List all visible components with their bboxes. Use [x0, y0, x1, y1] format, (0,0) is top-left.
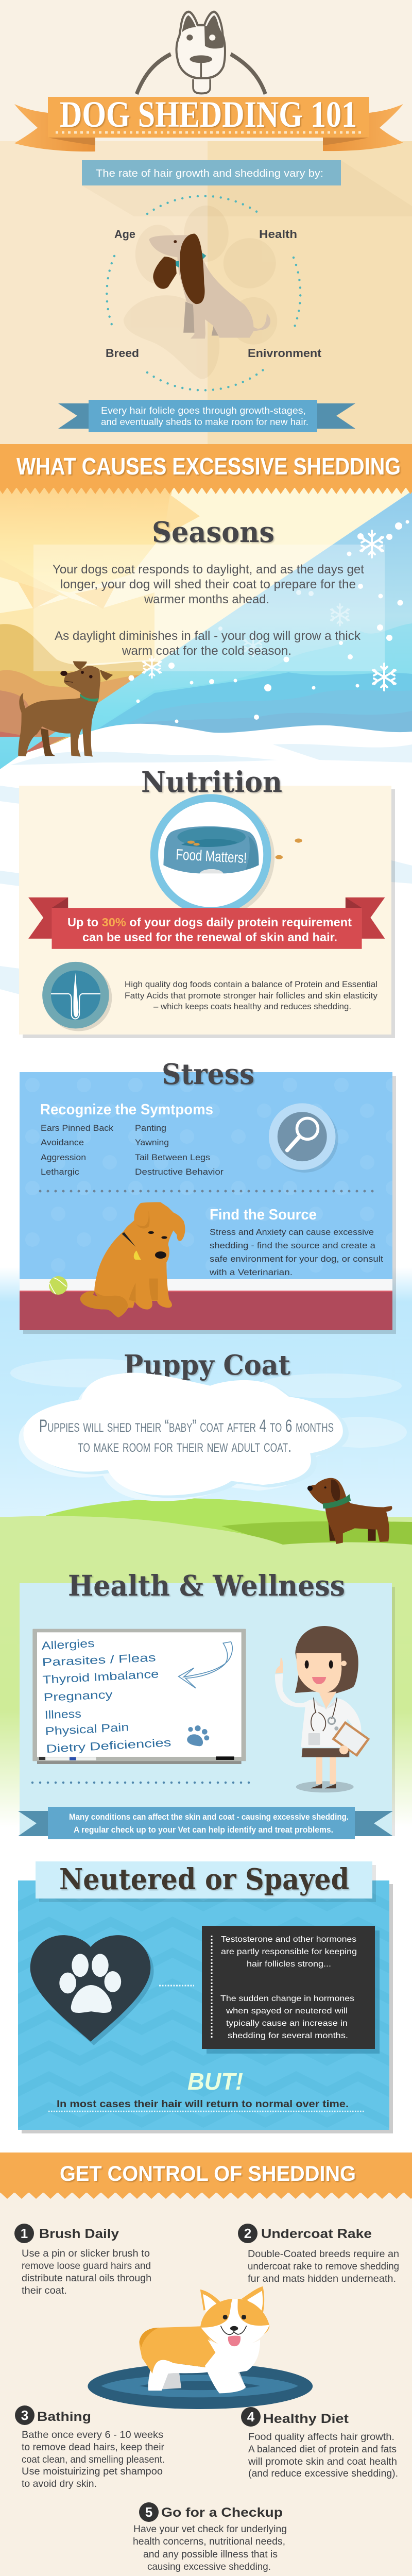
- heading: health and wellness: Health & Wellness: [68, 1569, 345, 1602]
- symptoms list: Lethargic: [41, 1167, 80, 1177]
- tip 5: go for a checkup: health concerns, nutritional needs,: [133, 2536, 285, 2547]
- tip 4: healthy diet: (and reduce excessive shedding).: [248, 2468, 398, 2479]
- but callout: [57, 2068, 349, 2110]
- heading: what causes excessive shedding: [0, 444, 412, 495]
- board list: Physical Pain: [45, 1720, 129, 1738]
- text box: hormones: The sudden change in hormones: [220, 1994, 354, 2003]
- faint paw behind dog: [124, 206, 277, 379]
- tip 2: undercoat rake: undercoat rake to remove shedding: [248, 2261, 399, 2272]
- panel: nutrition: [19, 786, 395, 1038]
- header background: [0, 0, 412, 450]
- snowflakes and snow dots: [129, 520, 409, 723]
- tip 1: brush daily: their coat.: [22, 2285, 67, 2296]
- subtitle box: The rate of hair growth and shedding vary by:: [96, 168, 323, 179]
- find the source text: Stress and Anxiety can cause excessive: [210, 1227, 374, 1237]
- board list: [41, 1637, 171, 1755]
- tip 5: go for a checkup: [133, 2502, 287, 2572]
- tip 2: undercoat rake: 2: [244, 2226, 251, 2241]
- get control background: [0, 2192, 412, 2576]
- symptoms list: Tail Between Legs: [135, 1153, 210, 1162]
- board list: Illness: [44, 1707, 81, 1721]
- heading: get control of shedding: [0, 2153, 412, 2199]
- tip 2: undercoat rake: Double-Coated breeds require an: [248, 2249, 399, 2260]
- tip 4: healthy diet: will promote skin and coat health: [248, 2456, 397, 2467]
- symptoms list: Destructive Behavior: [135, 1167, 224, 1177]
- heading: stress: Stress: [162, 1057, 254, 1091]
- tip 3: bathing: coat clean, and smelling pleasent.: [22, 2454, 165, 2465]
- panel: neutered or spayed: [18, 1880, 393, 2133]
- tip 1: brush daily: Brush Daily: [39, 2227, 119, 2241]
- tip 3: bathing: to avoid dry skin.: [22, 2479, 97, 2489]
- seasons text panel: [33, 545, 385, 671]
- tip 3: bathing: Bathing: [37, 2410, 91, 2424]
- tip 4: healthy diet: Food quality affects hair growth.: [248, 2432, 394, 2443]
- icon: hair follicle: [42, 962, 112, 1031]
- text box: hormones: when spayed or neutered will: [226, 2007, 348, 2015]
- seasons text: longer, your dog will shed their coat to prepare for the: [60, 578, 356, 591]
- tip 5: go for a checkup: and any possible illness that is: [143, 2549, 278, 2560]
- icon: tennis ball: [49, 1276, 67, 1295]
- red ribbon: can be used for the renewal of skin and hair.: [82, 930, 337, 944]
- dotted ring: [107, 196, 300, 390]
- text box: hormones: are partly responsible for keeping: [221, 1947, 357, 1956]
- board list: Parasites / Fleas: [42, 1651, 156, 1669]
- seasons text: warm coat for the cold season.: [122, 644, 291, 658]
- icon: paw on board: [187, 1725, 209, 1746]
- red ribbon: Up to 30% of your dogs daily protein requirement: [67, 916, 352, 929]
- tip 1: brush daily: 1: [21, 2226, 28, 2241]
- heading: seasons: Seasons: [152, 515, 274, 549]
- text box: hormones: typically cause an increase in: [226, 2019, 348, 2028]
- find the source text: Find the Source: [210, 1207, 317, 1223]
- nutrition text: Fatty Acids that promote stronger hair follicles and skin elasticity: [125, 991, 378, 1001]
- heading: get control of shedding: GET CONTROL OF SHEDDING: [60, 2161, 356, 2185]
- heading: puppy coat: Puppy Coat: [124, 1349, 290, 1381]
- faint sky clouds: [10, 1359, 407, 1448]
- health ribbon: Many conditions can affect the skin and coat - causing excessive shedding.: [69, 1812, 349, 1822]
- panel: health and wellness: [20, 1583, 395, 1836]
- heading: neutered or spayed: Neutered or Spayed: [59, 1862, 349, 1896]
- board list: Pregnancy: [43, 1688, 113, 1704]
- tip 2: undercoat rake: Undercoat Rake: [261, 2227, 372, 2241]
- symptoms list: Aggression: [41, 1153, 86, 1162]
- illustration: corgi on rug: [88, 2286, 313, 2409]
- seasons text: Your dogs coat responds to daylight, and as the days get: [53, 563, 364, 577]
- cloud: [19, 1372, 349, 1501]
- tip 3: bathing: to remove dead hairs, keep their: [22, 2442, 165, 2453]
- find the source text: [209, 1207, 383, 1277]
- symptoms list: Panting: [135, 1123, 166, 1133]
- symptoms list: [41, 1123, 224, 1177]
- but callout: In most cases their hair will return to normal over time.: [57, 2099, 349, 2110]
- food bowl medallion: [150, 794, 302, 918]
- but callout: BUT!: [187, 2068, 243, 2095]
- seasons text: As daylight diminishes in fall - your dog will grow a thick: [55, 629, 361, 643]
- board list: Dietry Deficiencies: [46, 1736, 171, 1755]
- factor labels: Age: [114, 228, 135, 241]
- symptoms list: Avoidance: [41, 1138, 84, 1147]
- icon: dog logo with arcs: [136, 12, 265, 94]
- tip 2: undercoat rake: [238, 2224, 399, 2284]
- tip 1: brush daily: [14, 2224, 151, 2296]
- text box: hormones: hair follicles strong...: [247, 1960, 331, 1969]
- symptoms list: Ears Pinned Back: [41, 1123, 114, 1133]
- find the source text: shedding - find the source and create a: [210, 1241, 376, 1250]
- arrow: [179, 1642, 232, 1688]
- heading: nutrition: Nutrition: [141, 765, 282, 799]
- nutrition text: – which keeps coats healthy and reduces shedding.: [153, 1002, 351, 1011]
- factor labels: Breed: [106, 347, 139, 360]
- text box: hormones: [202, 1926, 380, 2054]
- title ribbon: [14, 94, 403, 151]
- find the source text: safe environment for your dog, or consult: [210, 1254, 383, 1264]
- illustration: vet: [275, 1626, 370, 1792]
- whiteboard: [32, 1629, 246, 1764]
- tip 3: bathing: [15, 2405, 165, 2489]
- health ribbon: A regular check up to your Vet can help identify and treat problems.: [74, 1825, 333, 1835]
- puppy text: [39, 1416, 334, 1456]
- sky background: [0, 1267, 412, 1556]
- red ribbon: [28, 897, 385, 949]
- tip 1: brush daily: Use a pin or slicker brush to: [22, 2248, 150, 2259]
- illustration: hills: [0, 1498, 412, 1827]
- tip 1: brush daily: remove loose guard hairs and: [22, 2261, 151, 2272]
- subtitle box: [82, 160, 412, 216]
- tip 5: go for a checkup: 5: [145, 2504, 152, 2520]
- factor labels: [106, 228, 322, 360]
- symptoms heading: Recognize the Symtpoms: [40, 1101, 213, 1118]
- tip 3: bathing: 3: [21, 2408, 28, 2423]
- tip 3: bathing: Use moistuirizing pet shampoo: [22, 2466, 163, 2477]
- tip 4: healthy diet: [241, 2407, 398, 2479]
- panel: stress: [20, 1072, 396, 1334]
- health ribbon: [18, 1807, 393, 1839]
- puppy text: to make room for their new adult coat.: [78, 1436, 291, 1456]
- text box: hormones: Testosterone and other hormones: [221, 1935, 356, 1944]
- snow ground: [0, 724, 412, 994]
- seasons text: [53, 563, 364, 658]
- tip 1: brush daily: distribute natural oils through: [22, 2273, 151, 2284]
- info ribbon: Every hair folicle goes through growth-stages,: [101, 405, 306, 416]
- symptoms list: Yawning: [135, 1138, 169, 1147]
- nutrition text: High quality dog foods contain a balance of Protein and Essential: [125, 980, 377, 989]
- tip 5: go for a checkup: Go for a Checkup: [161, 2505, 283, 2520]
- illustration: sitting spaniel: [149, 233, 270, 338]
- tip 2: undercoat rake: fur and mats hidden underneath.: [248, 2274, 396, 2284]
- text box: hormones: shedding for several months.: [228, 2031, 348, 2040]
- find the source text: with a Veterinarian.: [209, 1267, 293, 1277]
- seasons background: cold side: [0, 491, 412, 769]
- tip 5: go for a checkup: causing excessive shedding.: [147, 2562, 271, 2572]
- info ribbon: and eventually sheds to make room for new hair.: [101, 417, 308, 427]
- factor labels: Enivronment: [248, 347, 322, 360]
- tip 4: healthy diet: 4: [247, 2409, 255, 2425]
- factor labels: Health: [259, 228, 297, 241]
- tip 4: healthy diet: A balanced diet of protein and fats: [248, 2444, 397, 2455]
- icon: magnifier: [269, 1103, 338, 1173]
- illustration: brown dog on hill: [307, 1478, 392, 1544]
- board list: Allergies: [41, 1637, 95, 1652]
- seasons text: warmer months ahead.: [144, 592, 269, 606]
- illustration: sad dog: [80, 1202, 185, 1317]
- icon: heart with paw: [30, 1935, 153, 2045]
- nutrition text: [125, 980, 378, 1011]
- board list: Thyroid Imbalance: [42, 1667, 159, 1686]
- info ribbon: [58, 400, 355, 432]
- seasons background: warm side: [0, 488, 412, 769]
- title: DOG SHEDDING 101: [60, 94, 357, 135]
- tip 4: healthy diet: Healthy Diet: [263, 2412, 349, 2426]
- illustration: brown dog in seasons: [18, 661, 113, 757]
- tip 5: go for a checkup: Have your vet check for underlying: [133, 2524, 287, 2535]
- tip 3: bathing: Bathe once every 6 - 10 weeks: [22, 2430, 163, 2441]
- bowl label: Food Matters!: [176, 846, 247, 867]
